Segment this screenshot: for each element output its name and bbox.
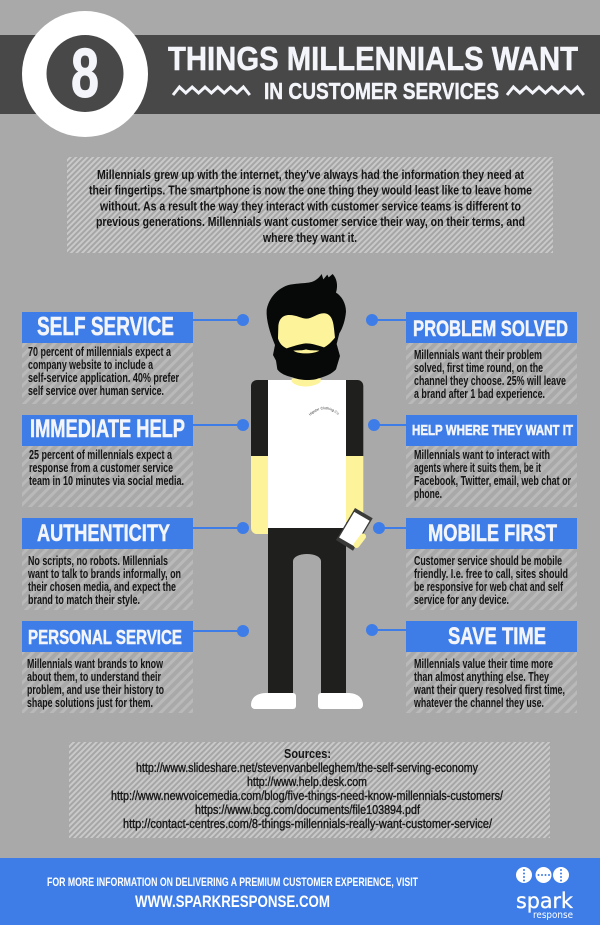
right sleeve [346,380,363,456]
sources panel: http://www.newvoicemedia.com/blog/five-things-need-know-millennials-customers/ [111,788,503,803]
face [278,313,335,348]
hair and beard [267,274,346,380]
connector [193,314,249,326]
card: self service: self service over human service. [28,383,164,398]
left sleeve [251,380,268,456]
right arm [346,456,363,522]
card: problem solved: a brand after 1 bad experience. [414,386,545,401]
card: authenticity: brand to match their style. [28,592,140,607]
card: self service: company website to include a [28,357,154,372]
title banner [0,11,600,137]
card: self service: 70 percent of millennials expect a [28,344,172,359]
card: personal service: PERSONAL SERVICE [28,627,182,649]
sources panel: Sources: [284,746,331,761]
footer [0,858,600,925]
mouth [293,349,319,353]
sources panel: http://www.help.desk.com [247,774,367,789]
sources panel: http://contact-centres.com/8-things-millennials-really-want-customer-service/ [123,816,492,831]
left arm [251,456,268,534]
connector [373,522,406,534]
number badge: 8: 8 [71,34,99,112]
card: self service: self-service application. 40% prefer [28,370,179,385]
sources panel [69,742,550,838]
connector [193,522,249,534]
card: immediate help [22,415,249,507]
card: problem solved [366,312,577,404]
card: problem solved: solved, first time round, on the [414,360,543,375]
card: self service [22,311,249,404]
card: mobile first [373,518,577,610]
title line 2: IN CUSTOMER SERVICES [264,78,499,104]
intro text panel [67,157,553,253]
spark response logo [516,867,574,921]
card: authenticity: No scripts, no robots. Millennials [28,553,168,568]
card: save time [366,621,577,713]
card: help where they want it: phone. [414,486,442,501]
sources panel: https://www.bcg.com/documents/file103894.pdf [195,802,420,817]
trousers [268,528,346,693]
website: WWW.SPARKRESPONSE.COM [135,892,330,911]
card: authenticity: AUTHENTICITY [37,520,170,547]
card: personal service: Millennials want brands to know [27,656,164,671]
neck [292,378,321,386]
connector [366,314,406,326]
card: immediate help: IMMEDIATE HELP [30,415,185,443]
right zigzag [507,87,584,95]
figure: bearded man holding phone [251,274,373,709]
card: authenticity: want to talk to brands informally, on [27,566,181,581]
spark response logo: spark [516,889,574,913]
head [267,274,346,386]
card: personal service [22,621,249,713]
card: personal service: problem, and use their history to [27,682,164,697]
card: personal service: shape solutions just for them. [27,695,153,710]
card: save time: SAVE TIME [448,623,546,650]
call to action: FOR MORE INFORMATION ON DELIVERING A PREMIUM CUSTOMER EXPERIENCE, VISIT [47,875,418,889]
connector [193,625,249,637]
card: mobile first: MOBILE FIRST [428,520,557,547]
shirt [268,380,346,528]
sources panel: http://www.slideshare.net/stevenvanbelleghem/the-self-serving-economy [136,760,478,775]
connector [366,624,406,636]
card: immediate help: response from a customer service [29,460,173,475]
card: personal service: about them, to understand their [27,669,161,684]
intro text panel: where they want it. [262,230,357,245]
connector [193,419,249,431]
card: authenticity [22,518,249,610]
card: problem solved: Millennials want their problem [414,347,542,362]
card: immediate help: team in 10 minutes via social media. [29,473,184,488]
spark response logo: response [533,910,573,921]
card: immediate help: 25 percent of millennials expect a [29,447,173,462]
card: authenticity: their chosen media, and expect the [28,579,176,594]
connector [368,419,406,431]
left shoe [251,693,296,709]
shirt: Hipster Clothing Co. [308,406,339,416]
left zigzag [173,87,250,95]
card: mobile first: service for any device. [414,592,509,607]
card: help where they want it [368,415,577,507]
number badge: 8 [22,11,148,137]
card: self service: SELF SERVICE [37,311,174,341]
right shoe [318,693,363,709]
phone [336,508,373,551]
